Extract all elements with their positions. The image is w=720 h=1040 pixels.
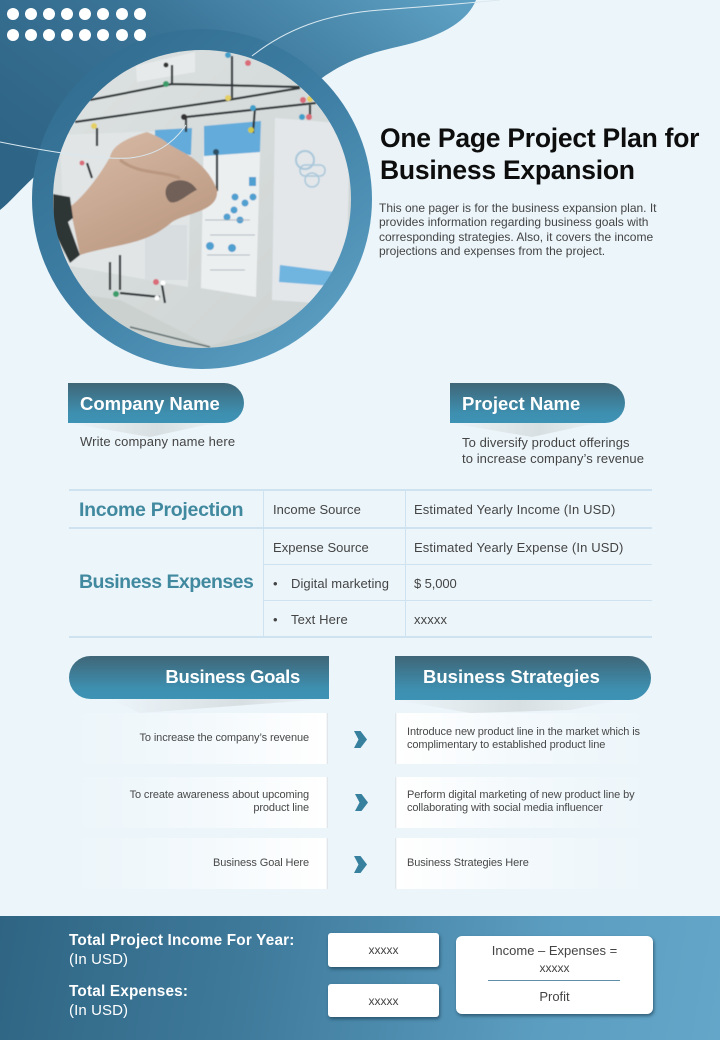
strategy card 1: complimentary to established product line (407, 739, 605, 751)
intro text: corresponding strategies. Also, it covers the income (379, 230, 653, 244)
bullet text here (273, 612, 348, 627)
expense source: Expense Source (273, 540, 369, 555)
total income label: (In USD) (69, 951, 128, 968)
business strategies header (395, 656, 651, 700)
total income label (69, 932, 295, 968)
profit formula box (456, 936, 653, 1014)
strategy card 3 (395, 838, 651, 889)
total income label: Total Project Income For Year: (69, 932, 295, 949)
business goals header (69, 656, 329, 699)
bullet digital marketing: • (273, 576, 278, 591)
estimated income: Estimated Yearly Income (In USD) (414, 502, 615, 517)
goal card 2 (70, 777, 328, 828)
project name header: Project Name (462, 393, 580, 414)
placeholder amount: xxxxx (414, 612, 447, 627)
bullet digital marketing (273, 576, 389, 591)
company name text: Write company name here (80, 434, 235, 449)
row heading: business expenses: Business Expenses (79, 571, 253, 593)
total expenses label: (In USD) (69, 1002, 128, 1019)
diagram dots (206, 177, 256, 252)
income and expenses table: Text Here (291, 612, 348, 627)
total expenses label (69, 983, 188, 1019)
intro text: This one pager is for the business expansion plan. It (379, 201, 656, 215)
project name header (450, 383, 625, 423)
profit formula box: xxxxx (540, 961, 570, 975)
goal card 3 (70, 838, 328, 889)
project name text: to increase company’s revenue (462, 451, 644, 466)
watch (53, 194, 80, 263)
income and expenses table: Digital marketing (291, 576, 389, 591)
profit formula box: Income – Expenses = (492, 943, 617, 958)
goal card 2: product line (253, 802, 309, 814)
intro text: projections and expenses from the project. (379, 244, 605, 258)
bullet text here: • (273, 612, 278, 627)
hand (70, 132, 217, 255)
goal card 3: Business Goal Here (213, 857, 309, 869)
digital marketing amount: $ 5,000 (414, 576, 457, 591)
project name text: To diversify product offerings (462, 435, 630, 450)
company name header (68, 383, 244, 423)
strategy card 1 (395, 713, 651, 764)
goal card 2: To create awareness about upcoming (130, 789, 309, 801)
left paper (60, 130, 192, 287)
arrow 1 (354, 731, 367, 748)
intro text: provides information regarding business goals with (379, 215, 648, 229)
pins (164, 62, 168, 68)
title (380, 123, 700, 185)
total expenses label: Total Expenses: (69, 983, 188, 1000)
expenses value box: xxxxx (368, 994, 398, 1008)
strategy card 2: Perform digital marketing of new product line by (407, 789, 635, 801)
goal card 1 (70, 713, 328, 764)
dots pattern (7, 8, 146, 41)
arrow 3 (354, 856, 367, 873)
income value box: xxxxx (368, 943, 398, 957)
photo: hand pinning wires on a board (50, 48, 360, 360)
hero graphic: blob, circular photo, dots (0, 0, 500, 369)
circle ring (32, 29, 372, 369)
background blob (0, 0, 476, 210)
arrow 2 (355, 794, 368, 811)
row heading: income projection: Income Projection (79, 499, 243, 521)
title: One Page Project Plan for (380, 123, 699, 153)
business goals header: Business Goals (165, 666, 300, 687)
strategy card 2 (395, 777, 651, 828)
estimated expense: Estimated Yearly Expense (In USD) (414, 540, 624, 555)
expenses value box (328, 984, 439, 1017)
footer band (0, 916, 720, 1040)
strategy card 3: Business Strategies Here (407, 857, 529, 869)
centre paper (200, 150, 260, 297)
project name text (462, 435, 644, 466)
strategy card 2: collaborating with social media influencer (407, 802, 603, 814)
title: Business Expansion (380, 155, 635, 185)
goal card 1: To increase the company’s revenue (139, 732, 309, 744)
strategy card 1: Introduce new product line in the market which is (407, 726, 640, 738)
income source: Income Source (273, 502, 361, 517)
income and expenses table (69, 489, 652, 638)
profit formula box: Profit (539, 989, 570, 1004)
white curves (0, 0, 500, 158)
business strategies header: Business Strategies (423, 666, 600, 687)
right paper (272, 118, 350, 305)
income value box (328, 933, 439, 967)
header wedge shadows (98, 423, 588, 713)
company name header: Company Name (80, 393, 220, 414)
top paper (136, 52, 195, 82)
wires (75, 56, 316, 303)
intro text (379, 201, 656, 258)
